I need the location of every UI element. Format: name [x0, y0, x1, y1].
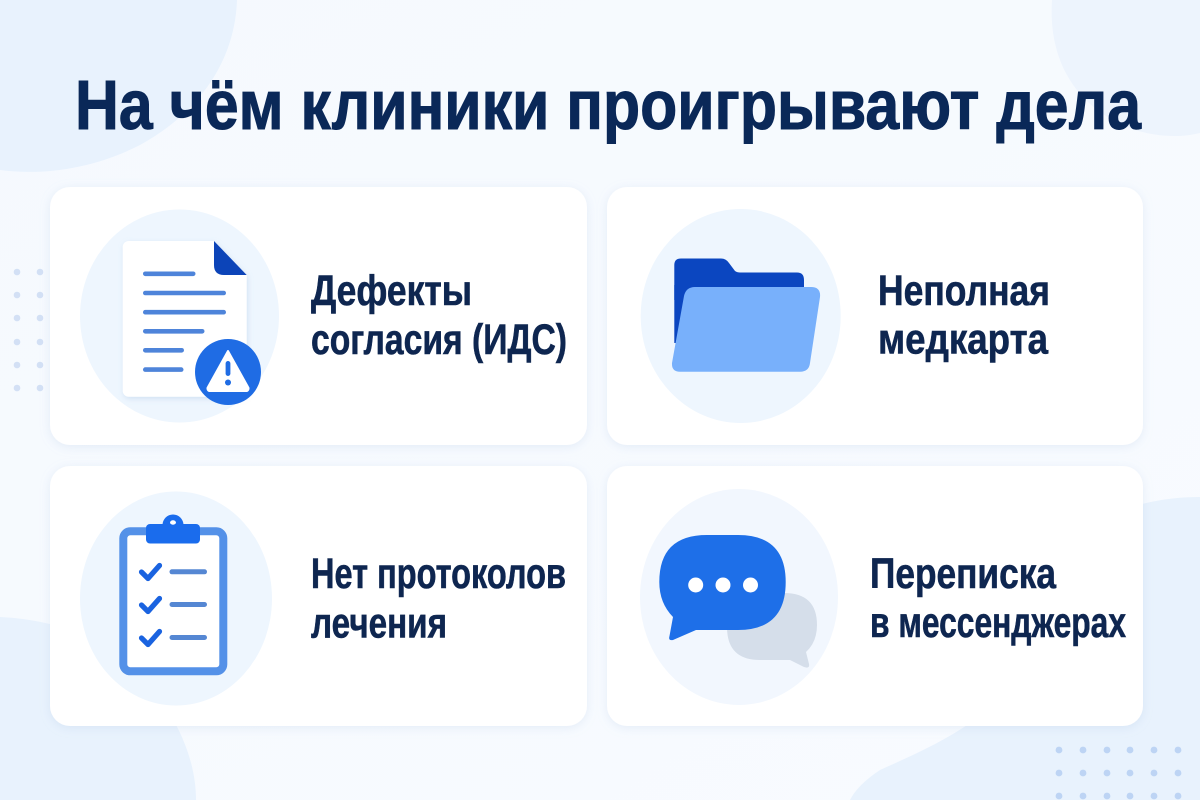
- label: no treatment protocols: [311, 550, 566, 648]
- label: incomplete medical record: [878, 267, 1050, 364]
- label: defects of consent: [311, 267, 567, 364]
- icon: folder: [641, 209, 841, 423]
- label: messenger correspondence: Переписка: [870, 550, 1057, 598]
- label: defects of consent: согласия (ИДС): [311, 316, 567, 364]
- icon: clipboard checklist: [80, 492, 272, 706]
- panel: incomplete medical record: [607, 187, 1143, 445]
- icon: document with warning: [80, 210, 279, 422]
- label: no treatment protocols: лечения: [311, 600, 447, 648]
- label: messenger correspondence: [870, 550, 1126, 647]
- label: no treatment protocols: Нет протоколов: [311, 550, 566, 598]
- panel: messenger correspondence: [607, 466, 1143, 726]
- label: defects of consent: Дефекты: [311, 267, 472, 315]
- label: incomplete medical record: медкарта: [878, 316, 1049, 364]
- panel: no treatment protocols: [50, 466, 587, 726]
- panel: defects of consent: [50, 187, 587, 445]
- label: incomplete medical record: Неполная: [878, 267, 1050, 315]
- icon: chat bubbles: [640, 489, 838, 705]
